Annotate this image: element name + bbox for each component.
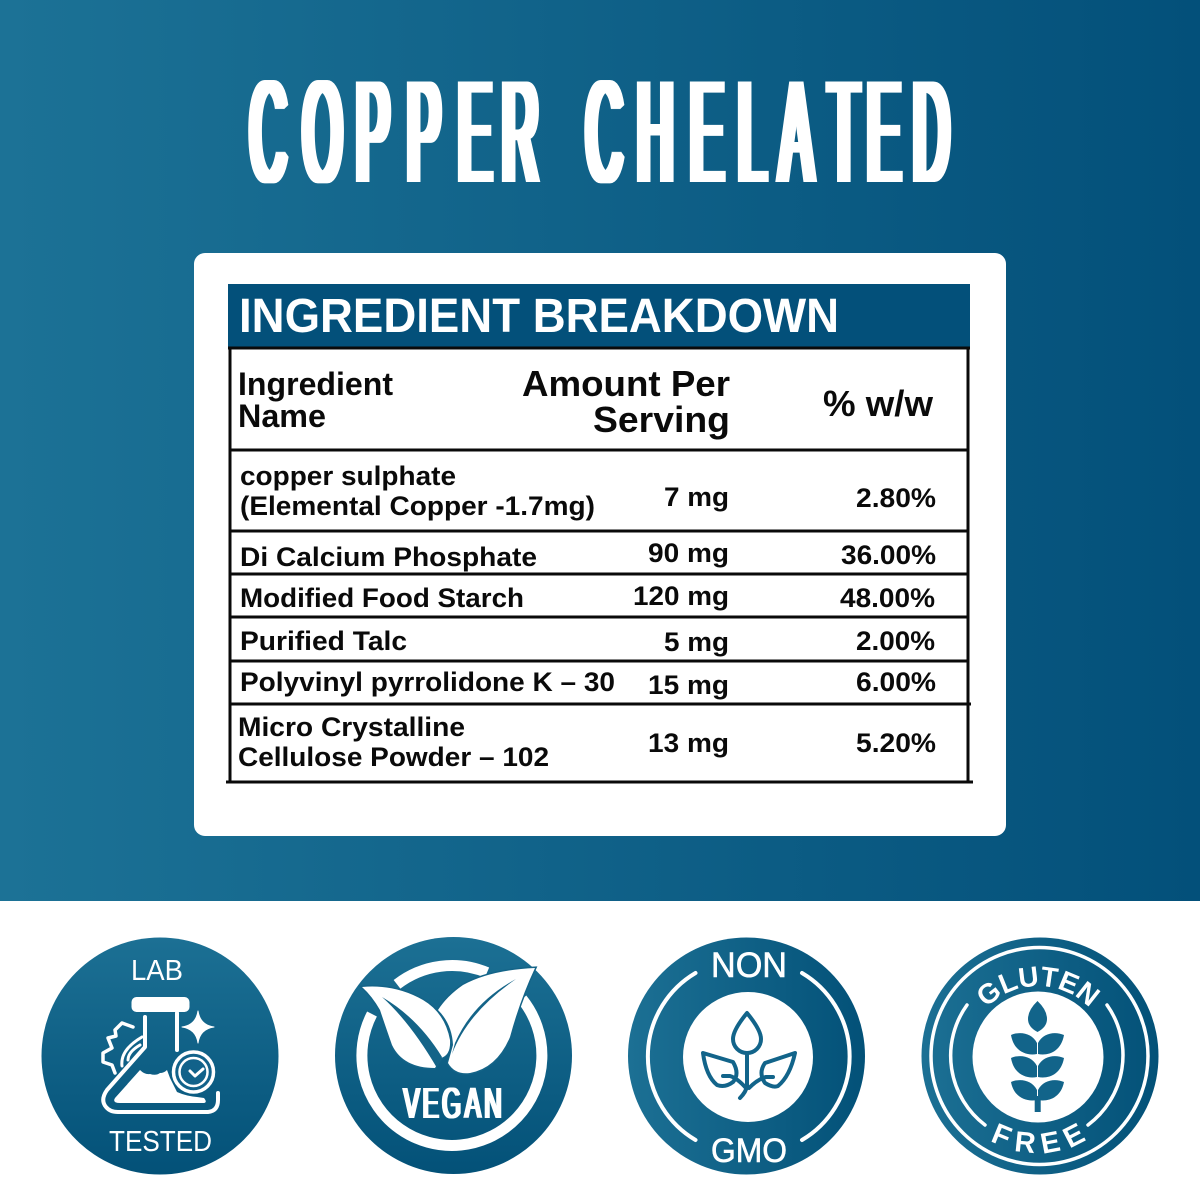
row: copper sulphate: copper sulphate — [240, 461, 456, 491]
table header row: Ingredient — [238, 366, 393, 402]
row: polyvinyl pyrrolidone: Polyvinyl pyrrolidone K – 30 — [240, 667, 615, 697]
row: micro crystalline cellulose: Cellulose Powder – 102 — [238, 742, 549, 772]
row: di calcium phosphate: Di Calcium Phosphate — [240, 542, 537, 572]
badge: gluten free — [922, 938, 1158, 1174]
row: purified talc — [240, 626, 935, 657]
row: copper sulphate: (Elemental Copper -1.7mg) — [240, 491, 595, 521]
row: copper sulphate: 2.80% — [856, 483, 936, 513]
icon: leaves — [362, 968, 535, 1073]
row: modified food starch — [240, 581, 935, 613]
table heading band: INGREDIENT BREAKDOWN — [239, 290, 839, 343]
row: modified food starch: Modified Food Starch — [240, 583, 524, 613]
row: di calcium phosphate: 90 mg — [648, 538, 729, 568]
row: purified talc: Purified Talc — [240, 626, 407, 656]
row: purified talc: 5 mg — [664, 627, 729, 657]
badge: vegan: VEGAN — [403, 1078, 502, 1128]
panel: ingredient card — [194, 253, 1006, 836]
table header row — [238, 363, 934, 440]
table header row: Amount Per — [522, 363, 730, 404]
row: micro crystalline cellulose: 5.20% — [856, 728, 936, 758]
row: purified talc: 2.00% — [856, 626, 935, 656]
row: di calcium phosphate: 36.00% — [841, 540, 936, 570]
table header row: Name — [238, 398, 326, 434]
icon: sprout and drop — [703, 1013, 795, 1098]
badge: lab tested: LAB — [131, 955, 183, 987]
row: micro crystalline cellulose: 13 mg — [648, 728, 729, 758]
row: micro crystalline cellulose — [238, 712, 936, 772]
icon: flask — [103, 997, 218, 1112]
table grid — [226, 347, 973, 782]
row: polyvinyl pyrrolidone: 6.00% — [856, 667, 936, 697]
title: COPPER CHELATED — [250, 51, 949, 214]
badge: non gmo: GMO — [711, 1132, 787, 1170]
badge: non gmo — [628, 938, 865, 1174]
row: copper sulphate — [240, 461, 936, 521]
badge: gluten free: GLUTEN — [978, 966, 1100, 1006]
badge: non gmo: NON — [711, 946, 787, 985]
badge: lab tested: TESTED — [109, 1126, 212, 1158]
row: polyvinyl pyrrolidone: 15 mg — [648, 670, 729, 700]
badge: gluten free: FREE — [992, 1122, 1086, 1154]
row: di calcium phosphate — [240, 538, 936, 572]
icon: wheat — [1011, 1001, 1064, 1112]
row: micro crystalline cellulose: Micro Crystalline — [238, 712, 465, 742]
row: copper sulphate: 7 mg — [664, 482, 729, 512]
row: polyvinyl pyrrolidone — [240, 667, 936, 700]
badge: lab tested — [42, 938, 278, 1174]
table header row: % w/w — [823, 383, 934, 424]
background panel — [0, 0, 1200, 901]
badge: vegan — [335, 937, 572, 1174]
row: modified food starch: 120 mg — [633, 581, 729, 611]
row: modified food starch: 48.00% — [840, 583, 935, 613]
table header row: Serving — [593, 399, 730, 440]
